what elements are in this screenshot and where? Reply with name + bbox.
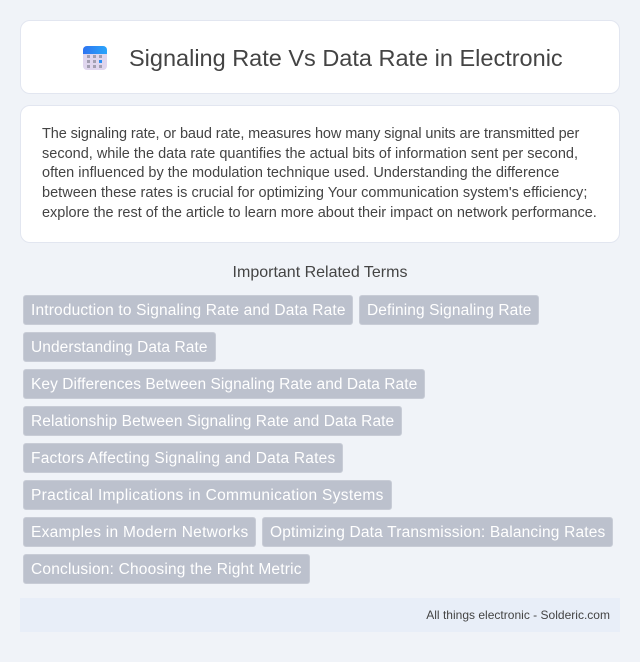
tag: Conclusion: Choosing the Right Metric [31,561,302,578]
tag: Relationship Between Signaling Rate and Data Rate [31,413,394,430]
tag [23,295,353,325]
tag [23,332,216,362]
icon: calendar [83,46,107,70]
tag [23,554,310,584]
tag [262,517,613,547]
title: Signaling Rate Vs Data Rate in Electronic [129,45,563,71]
tag [23,480,392,510]
tag: Examples in Modern Networks [31,524,248,541]
heading: important related terms: Important Related Terms [233,264,407,281]
tag [23,443,343,473]
text block: summary paragraph: often influenced by the modulation technique used. Understanding the difference [42,165,559,181]
text block: summary paragraph: between these rates is crucial for optimizing Your communication system's efficiency; [42,185,587,201]
panel: header [20,20,620,94]
text block: summary paragraph: The signaling rate, or baud rate, measures how many signal units are transmitted per [42,126,579,142]
tag [359,295,539,325]
tag [23,517,256,547]
footer credit: All things electronic - Solderic.com [426,608,610,622]
text block: summary paragraph: explore the rest of the article to learn more about their impact on network performance. [42,205,597,221]
tag: Introduction to Signaling Rate and Data Rate [31,302,346,319]
tag [23,406,402,436]
text block: summary paragraph [42,126,597,221]
tag: Understanding Data Rate [31,339,208,356]
text block: summary paragraph: second, while the data rate quantifies the actual bits of information sent per second, [42,146,578,162]
tag: Factors Affecting Signaling and Data Rates [31,450,336,467]
panel: related terms tags [23,295,613,584]
tag: Key Differences Between Signaling Rate and Data Rate [31,376,417,393]
panel: summary [20,105,620,243]
tag: Optimizing Data Transmission: Balancing Rates [270,524,605,541]
tag: Defining Signaling Rate [367,302,532,319]
footer [20,598,620,632]
tag [23,369,425,399]
tag: Practical Implications in Communication Systems [31,487,384,504]
